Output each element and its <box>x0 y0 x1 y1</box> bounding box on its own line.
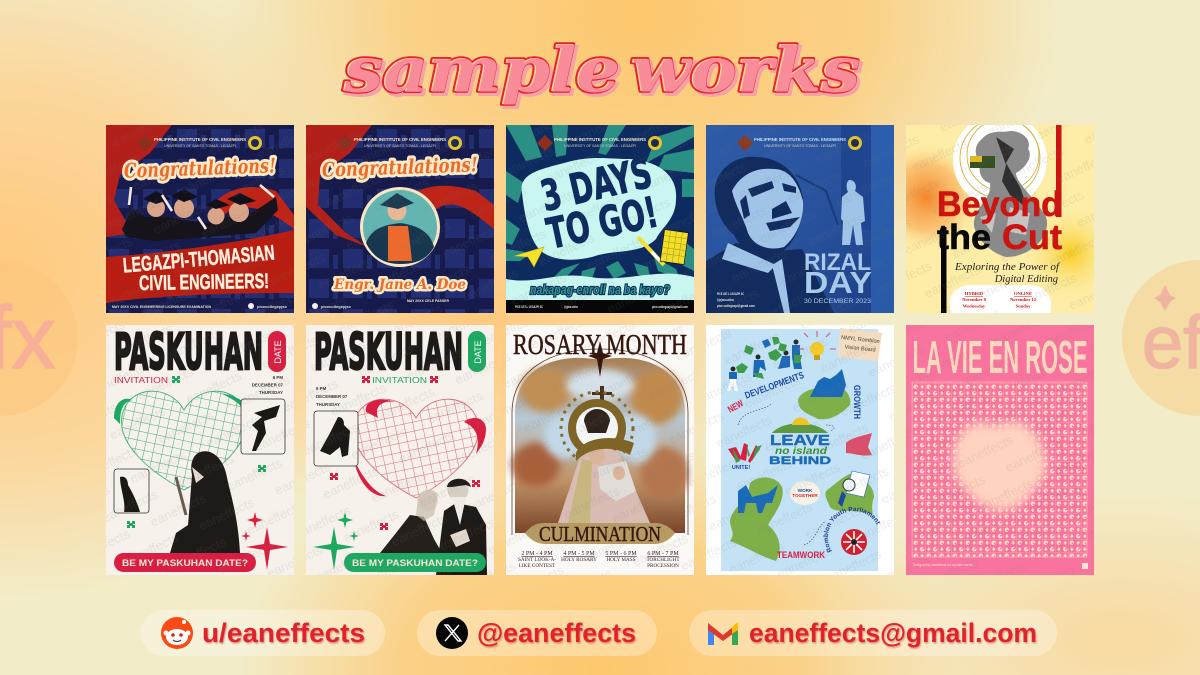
footer bar: @pjma.ustlsc <box>564 305 578 309</box>
date pill: November 12 <box>1010 297 1037 302</box>
team with puzzle pieces <box>727 337 802 391</box>
title: sample works <box>342 33 859 106</box>
date details: 6 PM <box>273 375 283 380</box>
couple <box>380 479 487 575</box>
subtitle: Exploring the Power of <box>954 262 1061 273</box>
icon: light bulb <box>798 331 836 360</box>
patterned field <box>912 382 1087 557</box>
ornament star <box>588 341 612 377</box>
date pill: Sunday <box>1016 304 1031 308</box>
work together badge: TOGETHER <box>792 493 818 498</box>
speech blob <box>522 158 676 260</box>
handle text: @eaneffects <box>477 618 636 648</box>
painted arch <box>512 349 688 535</box>
date pill <box>950 285 1051 313</box>
unite icon <box>728 443 762 471</box>
handshake emblem <box>846 433 872 456</box>
magnifier and document <box>838 471 870 507</box>
vision board note: Vision Board <box>844 344 876 354</box>
small credits: Designed by eaneffects for a poster series <box>913 563 973 567</box>
subtitle: Digital Editing <box>994 274 1058 285</box>
portrait silhouette <box>706 157 834 313</box>
rizal day heading: RIZAL <box>804 249 871 276</box>
PICE header: PHILIPPINE INSTITUTE OF CIVIL ENGINEERS <box>154 137 246 142</box>
icon: pencil and grid paper <box>638 230 688 265</box>
schedule: 4 PM - 5 PM <box>563 551 595 557</box>
congratulations lettering: Congratulations! <box>124 153 276 183</box>
email text: eaneffects@gmail.com <box>749 618 1037 648</box>
icon: gmail <box>708 622 738 645</box>
new developments: NEW <box>726 398 745 416</box>
schedule: LIKE CONTEST <box>519 563 556 569</box>
invitation label <box>114 376 180 383</box>
PICE header: UNIVERSITY OF SANTO TOMAS - LEGAZPI <box>164 144 236 148</box>
graduates photo <box>122 185 278 241</box>
caption: MAY 20XX CELE PASSER <box>407 299 449 303</box>
bust collage <box>970 131 1047 257</box>
panel: rizal day <box>706 125 894 313</box>
panel: beyond the cut <box>906 125 1094 313</box>
cta pill: BE MY PASKUHAN DATE? <box>352 558 478 568</box>
soft rose blob <box>954 422 1045 510</box>
red banner with heading: LEGAZPI-THOMASIAN <box>122 241 275 278</box>
footer bar <box>506 300 694 313</box>
PICE header: UNIVERSITY OF SANTO TOMAS - LEGAZPI <box>564 144 636 148</box>
PICE header <box>337 135 462 151</box>
schedule: 2 PM - 4 PM <box>521 551 553 557</box>
leave no island behind <box>769 432 831 467</box>
date pill: DATE <box>473 340 483 364</box>
PICE header: UNIVERSITY OF SANTO TOMAS - LEGAZPI <box>364 144 436 148</box>
schedule: HOLY ROSARY <box>561 557 597 563</box>
virgin statue <box>558 386 650 523</box>
growth: GROWTH <box>852 385 862 419</box>
invitation label: INVITATION <box>372 375 427 385</box>
sun <box>792 418 810 425</box>
sparkles <box>313 512 359 570</box>
graduate name: Engr. Jane A. Doe <box>333 277 466 293</box>
title text: Beyond <box>937 185 1062 224</box>
panel: la vie en rose <box>906 325 1094 575</box>
headline <box>540 159 657 248</box>
panel: paskuhan green-red poster <box>306 323 494 575</box>
clover marks <box>330 473 480 530</box>
panel: rosary month <box>506 325 694 575</box>
culmination banner: CULMINATION <box>539 522 661 546</box>
decorative logo circle right <box>1122 260 1200 416</box>
PICE header <box>137 135 262 151</box>
title text <box>937 190 1062 250</box>
graduate portrait <box>360 187 440 267</box>
panel: paskuhan green-red poster: PASKUHAN <box>314 323 463 381</box>
headline: 3 DAYS <box>536 148 656 221</box>
schedule: 6 PM - 7 PM <box>647 551 679 557</box>
date details: THURSDAY <box>259 390 283 395</box>
footer line: MAY 20XX CIVIL ENGINEERING LICENSURE EXAMINATION <box>112 305 211 309</box>
social handles: PICE UST-L LEGAZPI SC <box>717 292 744 296</box>
handle text: u/eaneffects <box>202 618 365 648</box>
panel: paskuhan red-green poster: PASKUHAN <box>114 323 263 381</box>
PICE header <box>737 135 862 151</box>
social handles <box>717 292 755 308</box>
teal rays <box>506 125 694 281</box>
schedule: HOLY MASS <box>606 557 636 563</box>
islands <box>730 385 874 561</box>
icon: reddit <box>161 617 193 649</box>
vision board note <box>838 328 882 361</box>
title: sample works <box>343 34 860 106</box>
clover marks <box>127 465 266 528</box>
panel: paskuhan red-green poster <box>106 323 294 575</box>
congratulations lettering: Congratulations! <box>321 152 478 182</box>
date pill: HYBRID <box>965 291 984 296</box>
guitarist <box>170 451 240 553</box>
photo box couple <box>314 411 358 466</box>
decorative logo circle left <box>0 260 78 416</box>
cta pill <box>114 553 256 572</box>
hibiscus and ryp ring: Romblon Youth Parliament <box>823 506 880 553</box>
red banner with heading <box>106 230 294 303</box>
rizal day heading: DAY <box>804 265 872 300</box>
date details: DECEMBER 07 <box>252 382 284 388</box>
panel: vision board <box>706 325 894 575</box>
standing figure <box>841 180 865 245</box>
halo <box>953 125 1047 204</box>
PICE header: PHILIPPINE INSTITUTE OF CIVIL ENGINEERS <box>754 137 846 142</box>
title: ROSARY MONTH <box>513 329 687 361</box>
icon: paper plane <box>514 247 544 267</box>
title: sample works <box>345 36 862 109</box>
teamwork: TEAMWORK <box>777 550 825 560</box>
growth climbers <box>810 369 846 397</box>
contact: reddit <box>141 610 385 656</box>
date pill <box>468 331 486 372</box>
schedule: PROCESSION <box>647 563 679 569</box>
date details <box>252 375 284 395</box>
footer line: picecollegepjsc <box>257 305 287 309</box>
tagline: nakapag-enroll na ba kayo? <box>530 282 670 297</box>
date pill: ONLINE <box>1014 291 1032 296</box>
sparkles <box>241 512 288 570</box>
footer handle: picecollegepjsc <box>321 305 351 309</box>
date details: 6 PM <box>316 386 327 391</box>
icon: x <box>436 617 468 649</box>
footer bar: PICE UST-L LEGAZPI SC <box>515 305 543 309</box>
headline: TO GO! <box>542 187 662 258</box>
contact: x <box>417 610 657 656</box>
vision board note: NMYL Romblon <box>841 335 880 345</box>
small credits <box>913 563 1088 569</box>
social handles: pice.ustlegazpi@gmail.com <box>717 304 755 308</box>
unite icon: UNITE! <box>732 465 750 471</box>
panel: congratulations group <box>106 125 294 313</box>
schedule <box>518 551 680 569</box>
PICE header <box>537 135 662 151</box>
PICE header: PHILIPPINE INSTITUTE OF CIVIL ENGINEERS <box>554 137 646 142</box>
footer bar: pice.ustlegazpi@gmail.com <box>652 305 688 309</box>
work together badge: WORK <box>798 488 813 493</box>
date pill <box>268 331 286 372</box>
footer handle <box>312 303 351 309</box>
invitation label: INVITATION <box>114 375 168 385</box>
bars <box>941 125 1062 313</box>
contact: gmail <box>689 610 1057 656</box>
new developments: DEVELOPMENTS <box>744 370 806 402</box>
leave no island behind: BEHIND <box>769 455 831 467</box>
date details <box>316 386 348 407</box>
leave no island behind: LEAVE <box>770 432 830 449</box>
photo box dancer <box>241 399 285 454</box>
schedule: SAINT LOOK-A- <box>518 557 556 563</box>
panel: congratulations individual <box>306 125 494 313</box>
date details: THURSDAY <box>316 402 340 407</box>
date details: DECEMBER 07 <box>316 394 348 399</box>
wire heart <box>352 398 486 507</box>
meeting scene <box>738 485 778 513</box>
date pill: November 8 <box>962 297 987 302</box>
cta pill: BE MY PASKUHAN DATE? <box>122 558 248 568</box>
subtitle <box>954 262 1061 285</box>
title text: the <box>937 218 991 257</box>
title text: Cut <box>1002 218 1062 257</box>
panel: 3 days to go <box>506 125 694 313</box>
cta pill <box>344 553 486 572</box>
work together badge <box>790 481 820 505</box>
social handles: @pjma.ustlsc <box>717 298 734 302</box>
red banner with heading: CIVIL ENGINEERS! <box>139 270 269 295</box>
PICE header: PHILIPPINE INSTITUTE OF CIVIL ENGINEERS <box>354 137 446 142</box>
date pill: DATE <box>273 340 283 364</box>
schedule: 5 PM - 6 PM <box>605 551 637 557</box>
rizal day heading <box>804 254 872 303</box>
invitation label <box>362 375 438 385</box>
rizal day heading: 30 DECEMBER 2023 <box>804 298 871 305</box>
new developments <box>726 370 806 416</box>
PICE header: UNIVERSITY OF SANTO TOMAS - LEGAZPI <box>764 144 836 148</box>
leave no island behind: no island <box>775 446 828 457</box>
wave band <box>506 274 694 301</box>
wire heart <box>114 390 252 490</box>
dotted path <box>738 403 834 545</box>
photo box singer <box>114 469 149 513</box>
watermark <box>106 125 1094 575</box>
schedule: TORCHLIGHT <box>646 557 680 563</box>
footer line <box>112 303 287 309</box>
date pill: Wednesday <box>963 304 986 308</box>
